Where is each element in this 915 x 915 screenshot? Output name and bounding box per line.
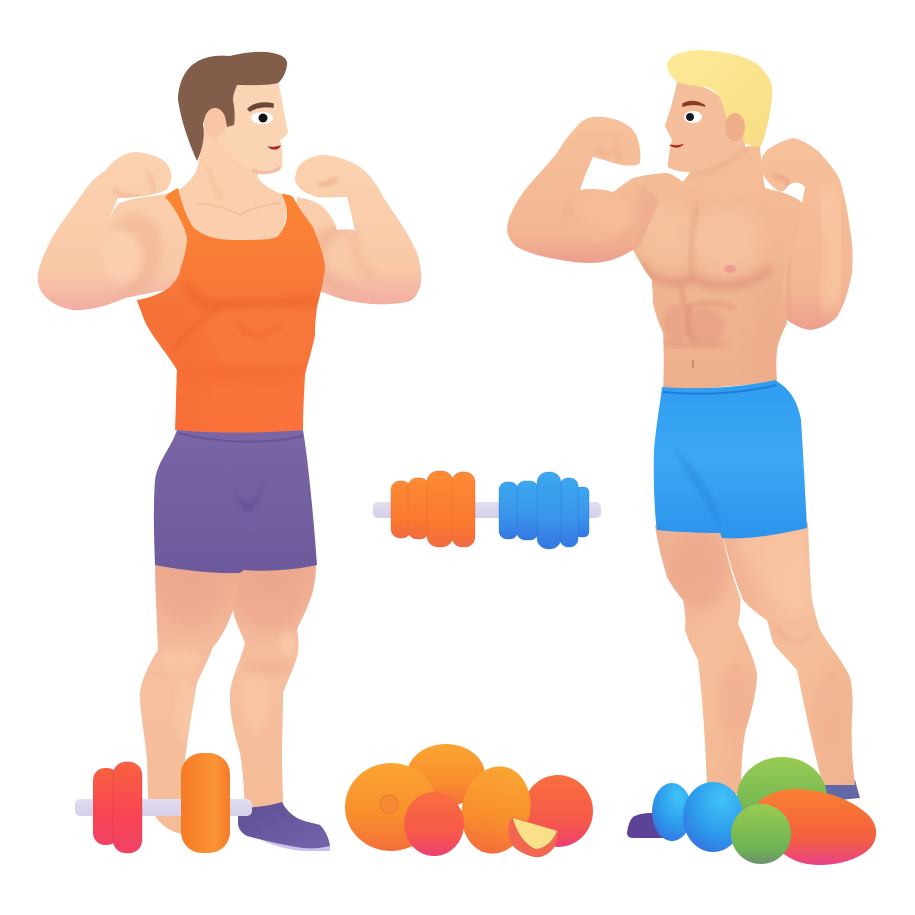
blue plates — [499, 472, 589, 549]
right man: shoes — [627, 780, 860, 838]
mouth — [269, 146, 280, 149]
right man: blue shorts — [654, 380, 807, 538]
right man: torso with muscles — [633, 150, 802, 392]
right man: legs — [655, 520, 855, 795]
left man: raised arm on viewer right — [290, 155, 421, 304]
left man: raised arm on viewer left — [38, 152, 198, 310]
orange plate — [181, 753, 230, 853]
mouth — [670, 144, 683, 147]
left man: orange tank top — [137, 188, 325, 433]
hair — [667, 50, 772, 147]
fruit: right red — [523, 775, 593, 847]
bottom-left dumbbell — [75, 753, 252, 853]
fruit: lemon wedge — [508, 817, 558, 857]
centre dumbbell — [373, 471, 601, 549]
left man — [38, 52, 421, 851]
fruit: blue balls — [652, 782, 743, 852]
fruit: middle orange — [454, 760, 538, 860]
eyebrow — [683, 102, 705, 106]
fruit: green ball — [731, 804, 791, 864]
bar — [373, 502, 601, 518]
left man: legs — [140, 560, 316, 834]
eyebrow — [248, 103, 273, 111]
bottom-right fruit pile — [652, 757, 876, 865]
left man: purple shorts — [154, 430, 317, 573]
ear — [725, 113, 745, 141]
fruit: mango — [758, 789, 876, 865]
fruit: green melon — [737, 757, 827, 837]
right man: head and face — [665, 50, 772, 200]
fruit: left orange — [345, 763, 437, 851]
bar — [75, 799, 252, 816]
orange plates — [391, 471, 475, 547]
hair — [178, 52, 287, 161]
ear — [204, 108, 226, 138]
left man: head and face — [178, 52, 288, 174]
eye — [251, 112, 273, 124]
right man: arm flexing to viewer right — [760, 138, 853, 330]
eye — [684, 111, 702, 123]
fruit: top orange — [407, 744, 485, 806]
red plates — [93, 762, 142, 853]
right man: arm flexing to viewer left — [507, 117, 665, 263]
left man: neck and chest — [165, 120, 290, 245]
right man — [507, 50, 860, 838]
centre fruit pile — [345, 744, 593, 860]
fruit: front red — [404, 792, 464, 856]
left man: shoe — [238, 802, 330, 851]
